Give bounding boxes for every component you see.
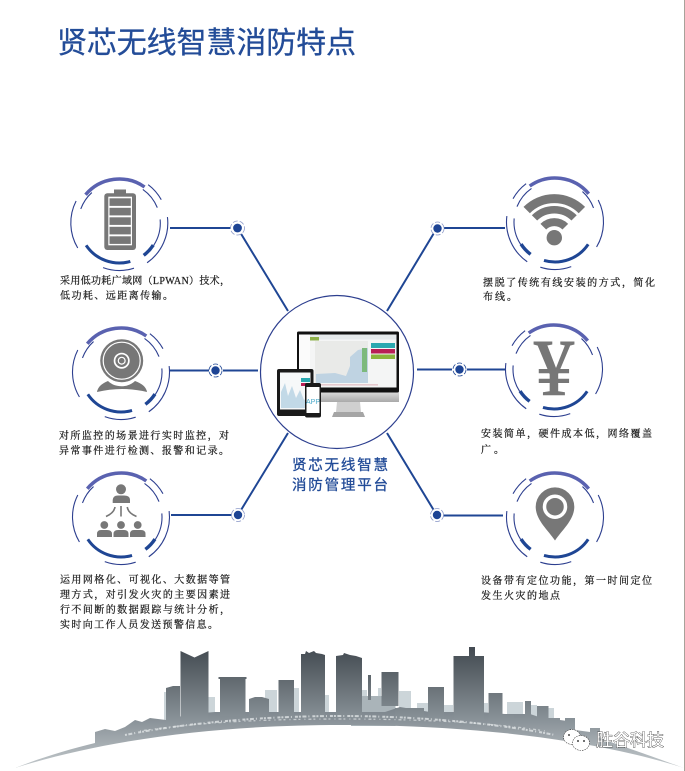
icon: wifi (527, 199, 582, 245)
medium building (223, 696, 396, 727)
text block (60, 274, 230, 302)
connector lines (417, 368, 505, 370)
platform name: 消防管理平台 (292, 477, 388, 494)
platform name (292, 457, 388, 494)
phone (305, 383, 321, 418)
connector node (430, 508, 444, 522)
title: 贤芯无线智慧消防特点 (57, 27, 356, 60)
ring (487, 302, 621, 436)
text block (481, 574, 652, 602)
icon: webcam (97, 339, 147, 392)
text block: 运用网格化、可视化、大数据等管 (60, 573, 230, 586)
text block: 安装简单，硬件成本低，网络覆盖 (481, 427, 652, 440)
text block (59, 429, 229, 457)
connector node (209, 364, 222, 377)
window speckles (125, 716, 555, 735)
text block: 实时向工作人员发送预警信息。 (60, 618, 218, 631)
city skyline (15, 647, 684, 768)
text block: 摆脱了传统有线安装的方式，简化 (483, 276, 655, 289)
connector lines (170, 228, 288, 311)
panel: central platform (260, 296, 414, 494)
text block (483, 276, 655, 303)
text block: 发生火灾的地点 (481, 589, 561, 602)
panel: real-time camera monitoring (54, 305, 258, 457)
connector lines (387, 228, 505, 311)
connector node (431, 222, 444, 235)
connector lines (171, 433, 288, 515)
platform name: 贤芯无线智慧 (292, 457, 388, 474)
connector node (232, 508, 244, 522)
tablet (277, 369, 314, 416)
connector lines (170, 370, 258, 372)
panel: location pin (387, 433, 652, 602)
connector node (453, 363, 466, 376)
icon: people hierarchy (97, 484, 146, 537)
icon: yen: ¥ (534, 325, 574, 413)
panel: low power battery (52, 156, 288, 311)
text block: 布线。 (483, 290, 517, 303)
text block: 异常事件进行检测、报警和记录。 (59, 444, 229, 457)
phone: APP (306, 399, 320, 406)
ring (488, 155, 622, 289)
ground (15, 707, 684, 768)
foreground buildings (166, 647, 575, 732)
panel: low cost yen (417, 302, 652, 456)
text block: 对所监控的场景进行实时监控，对 (59, 429, 229, 442)
panel: wireless wifi (387, 155, 655, 311)
monitor (297, 332, 399, 417)
ring (488, 450, 622, 584)
ring (54, 450, 188, 584)
text block (60, 573, 230, 631)
text block: 理方式，对引发火灾的主要因素进 (60, 588, 230, 601)
icon: map pin (536, 487, 574, 540)
text block: 广。 (481, 443, 504, 456)
wechat icon (564, 730, 590, 750)
ring (54, 305, 188, 439)
text block: 低功耗、远距离传输。 (60, 289, 173, 302)
watermark: 胜谷科技 (596, 731, 664, 750)
text block: 采用低功耗广域网（LPWAN）技术， (60, 274, 230, 287)
ring (52, 156, 187, 290)
text block (481, 427, 652, 456)
central circle (260, 296, 414, 448)
background buildings (164, 688, 554, 726)
connector node (230, 221, 244, 235)
text block: 设备带有定位功能，第一时间定位 (481, 574, 652, 587)
icon: battery (104, 190, 136, 250)
panel: grid management (54, 433, 288, 631)
text block: 行不间断的数据跟踪与统计分析， (60, 603, 230, 616)
connector lines (387, 433, 503, 516)
